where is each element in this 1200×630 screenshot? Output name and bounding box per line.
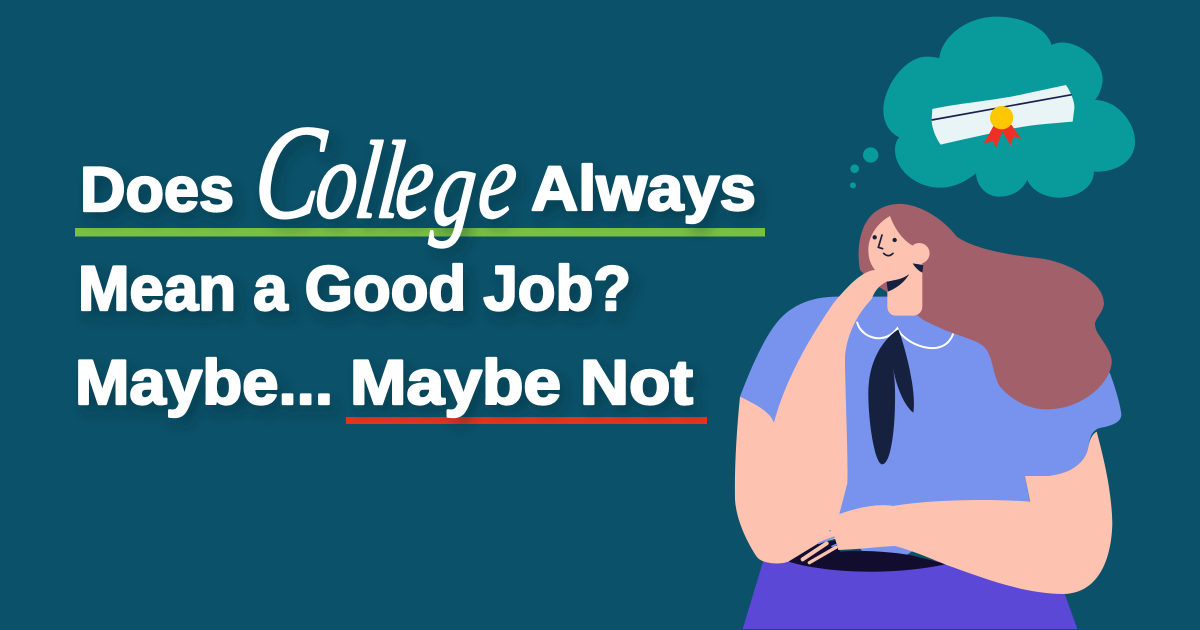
chin shadows (887, 263, 923, 292)
title (75, 98, 765, 424)
skirt (743, 561, 1077, 629)
neck tie (868, 329, 914, 464)
face (868, 216, 919, 275)
red ribbon tails (984, 125, 1021, 149)
title line 1: College script word: C (248, 98, 333, 246)
thought bubble with diploma (850, 17, 1135, 198)
woman figure (735, 204, 1121, 629)
ear (909, 243, 930, 264)
neck (887, 260, 922, 316)
title line 1: College script word (247, 98, 526, 249)
folded forearm (835, 432, 1112, 594)
raised arm and hand (735, 270, 909, 563)
thought cloud (883, 17, 1135, 198)
green underline (75, 228, 765, 236)
collar (857, 322, 953, 348)
belt (788, 540, 947, 572)
gold seal (990, 106, 1013, 129)
title line 1: Always: Always (531, 154, 756, 224)
facial features (873, 235, 896, 256)
fingers (803, 530, 837, 563)
thought dots (850, 147, 878, 188)
diploma ribbon band (932, 95, 1072, 120)
title line 1: College script word: ollege (310, 120, 524, 249)
blouse (740, 297, 1121, 555)
red underline (346, 417, 707, 424)
title line 1: Does: Does (80, 155, 234, 225)
title line 3: Maybe...: Maybe... (75, 348, 333, 418)
long hair (859, 204, 1112, 409)
diploma scroll (932, 85, 1074, 145)
title line 2: Mean a Good Job? (78, 254, 631, 324)
title line 3: Maybe Not: Maybe Not (350, 348, 693, 418)
